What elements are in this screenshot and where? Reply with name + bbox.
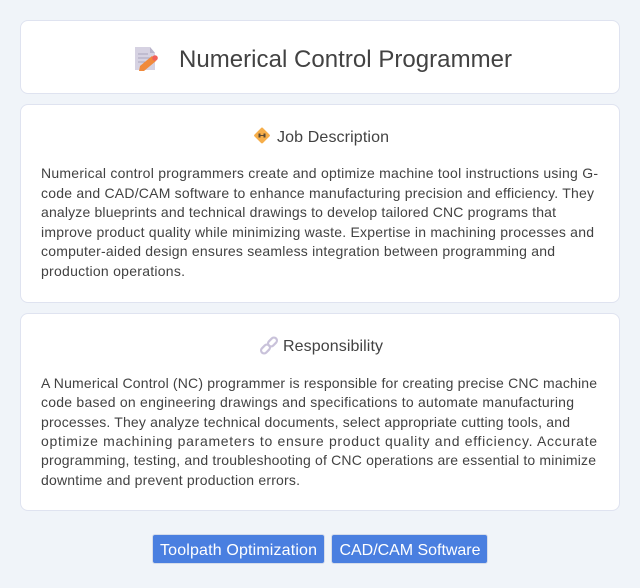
text block: job description: computer-aided design ensures seamless integration between programming and: [41, 243, 555, 259]
tag: toolpath optimization: Toolpath Optimization: [160, 542, 317, 559]
text block: job description: analyze blueprints and technical drawings to develop tailored CNC programs that: [41, 204, 556, 220]
heading: responsibility: Responsibility: [283, 338, 383, 355]
panel: responsibility card: [20, 313, 620, 511]
text block: responsibility: optimize machining parameters to ensure product quality and efficiency. Accurate: [41, 433, 597, 449]
panel: job description card: [20, 104, 620, 303]
text block: job description: code and CAD/CAM software to enhance manufacturing precision and efficiency. They: [41, 185, 594, 201]
text block: job description: improve product quality while minimizing waste. Expertise in machining processes and: [41, 224, 594, 240]
panel: title card: [20, 20, 620, 94]
text block: job description: Numerical control programmers create and optimize machine tool instructions using G-: [41, 165, 598, 181]
icon: chain link: [260, 336, 278, 355]
title: Numerical Control Programmer: [179, 46, 512, 73]
text block: job description: [41, 165, 598, 279]
tag: cad/cam software: CAD/CAM Software: [340, 542, 481, 559]
text block: job description: production operations.: [41, 263, 185, 279]
text block: responsibility: downtime and prevent production errors.: [41, 472, 300, 488]
tag: toolpath optimization: [152, 534, 325, 564]
heading: job description: Job Description: [277, 129, 389, 146]
icon: diamond sign: [254, 127, 270, 144]
tag: cad/cam software: [331, 534, 488, 564]
text block: responsibility: [41, 375, 597, 488]
text block: responsibility: processes. They analyze technical documents, select appropriate cutting tools, and: [41, 414, 570, 430]
text block: responsibility: A Numerical Control (NC) programmer is responsible for creating precise CNC machine: [41, 375, 597, 391]
icon: document with pencil: [135, 47, 158, 71]
text block: responsibility: code based on engineering drawings and specifications to automate manufacturing: [41, 394, 574, 410]
text block: responsibility: programming, testing, and troubleshooting of CNC operations are essential to minimize: [41, 452, 596, 468]
